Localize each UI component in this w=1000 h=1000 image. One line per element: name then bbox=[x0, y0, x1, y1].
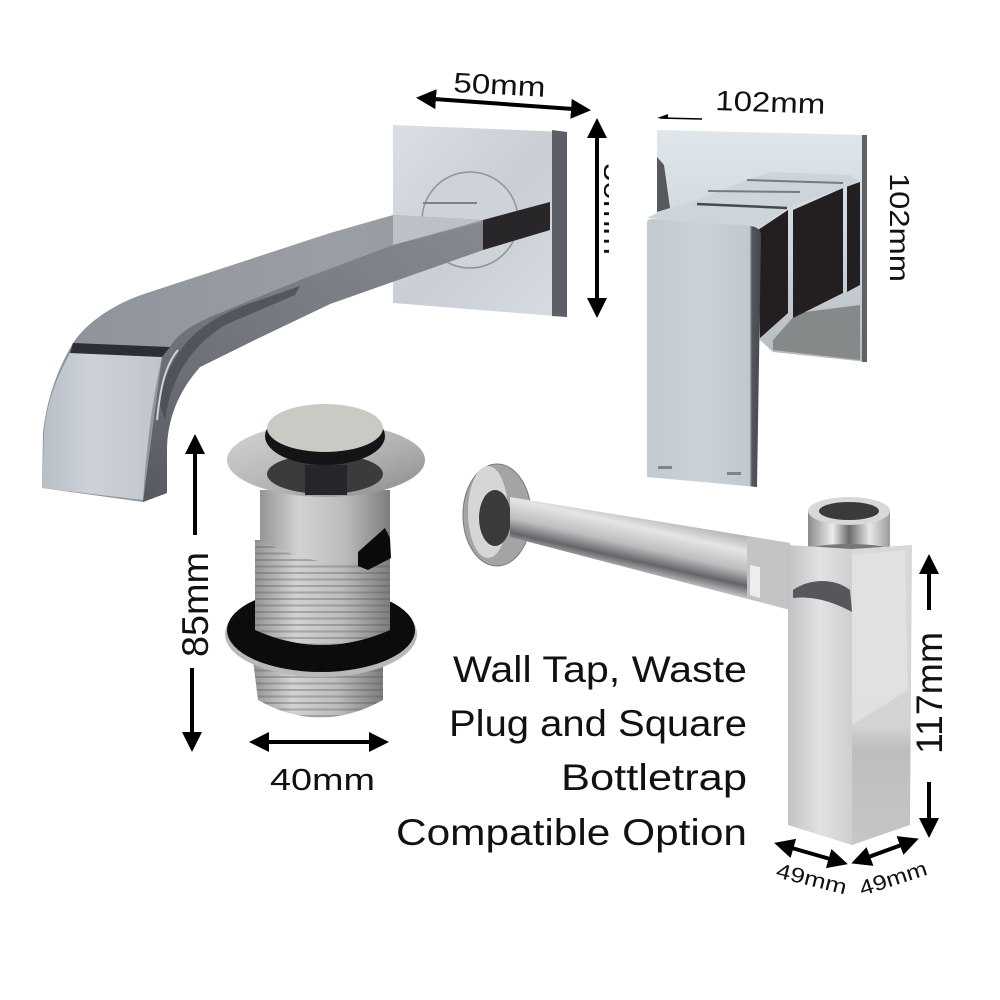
dimension: spout plate height: 50mm bbox=[598, 163, 629, 255]
caption: Bottletrap bbox=[561, 757, 747, 798]
caption bbox=[396, 649, 747, 853]
dimension: valve plate width bbox=[657, 85, 826, 120]
dimension: trap left depth bbox=[774, 844, 849, 899]
trap wall flange bbox=[463, 464, 531, 566]
waste upper body bbox=[260, 490, 391, 570]
dimension: waste height: 85mm bbox=[175, 552, 216, 657]
dimension: trap right depth: 49mm bbox=[856, 857, 930, 901]
dimension: valve plate width: 102mm bbox=[715, 85, 826, 120]
dimension: waste width bbox=[253, 742, 385, 797]
dimension: spout plate width: 50mm bbox=[453, 67, 546, 103]
spout square backplate bbox=[393, 125, 567, 317]
dimension: spout plate width bbox=[420, 67, 587, 110]
wall spout tap bbox=[42, 125, 567, 502]
dimension: trap right depth bbox=[855, 840, 930, 901]
waste threaded body bbox=[255, 540, 390, 645]
dimension: waste width: 40mm bbox=[270, 762, 375, 797]
waste black washer bbox=[225, 588, 417, 677]
caption: Plug and Square bbox=[449, 703, 747, 744]
curved spout arm bbox=[42, 202, 550, 502]
caption: Compatible Option bbox=[396, 812, 747, 853]
trap top connector bbox=[808, 497, 890, 556]
dimension: trap height: 117mm bbox=[909, 632, 950, 754]
dimension: trap left depth: 49mm bbox=[774, 860, 849, 899]
valve top surfaces bbox=[647, 172, 860, 228]
trap square bottle body bbox=[788, 545, 912, 845]
dimension: valve plate height: 102mm bbox=[884, 173, 915, 282]
valve dark block bbox=[758, 182, 860, 338]
mixer valve bbox=[647, 130, 867, 487]
waste top flange bbox=[227, 423, 425, 497]
trap horizontal pipe bbox=[510, 497, 790, 610]
waste lower thread bbox=[253, 660, 383, 718]
caption: Wall Tap, Waste bbox=[453, 649, 747, 690]
valve lever handle bbox=[647, 219, 761, 487]
waste plug cap bbox=[265, 404, 385, 465]
valve square backplate bbox=[657, 130, 867, 362]
pop-up waste plug bbox=[225, 404, 425, 718]
square bottle trap bbox=[463, 464, 912, 845]
